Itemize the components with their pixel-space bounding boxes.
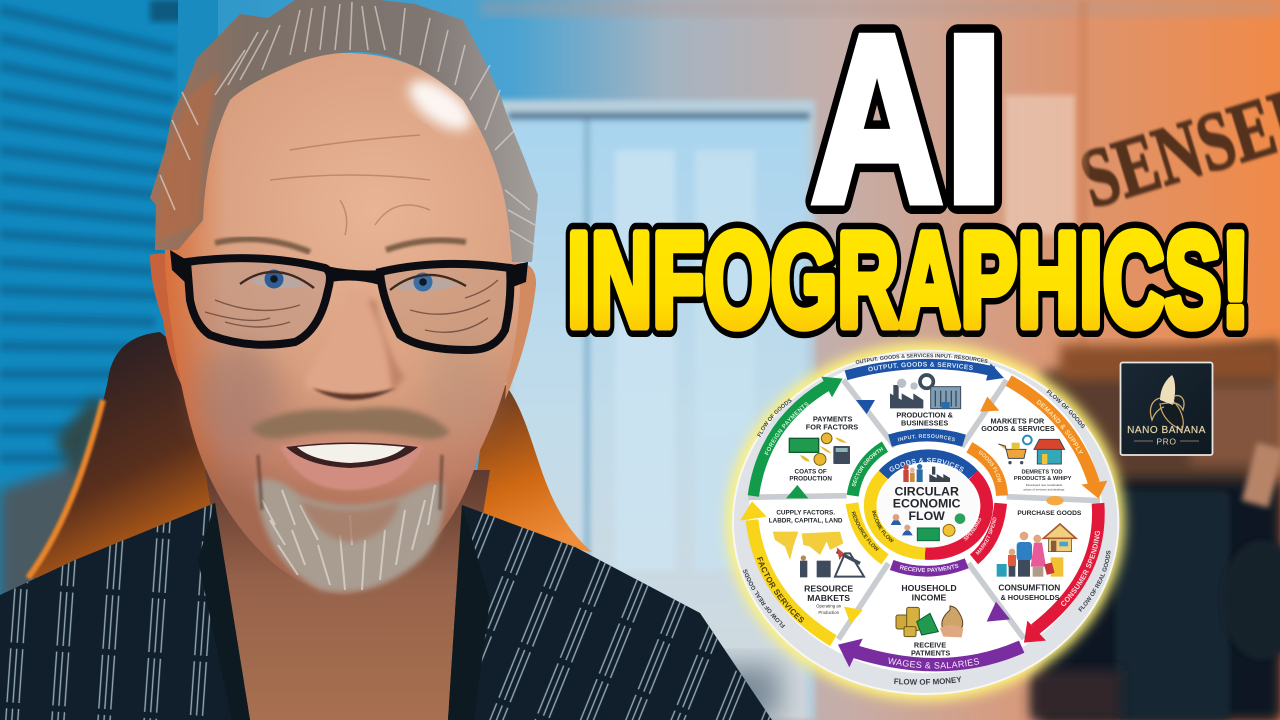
neck [205,470,490,720]
outer ring captions: FLOW OF REAL GOODS [1078,550,1110,612]
panel: consumption and households: PURCHASE GOODS [1017,510,1082,517]
icon: banana [1150,375,1184,430]
panel: resource markets: Operating an [816,603,842,608]
panel: markets for goods and services: prices of services and dealings [1024,488,1065,492]
panel: payments for factors: FOR FACTORS [806,423,858,432]
forehead lines [270,135,430,235]
central hub: SPENDING [964,518,982,540]
panel: household income [896,583,963,658]
arrow: demand and supply (orange) [1006,375,1108,499]
central hub [864,449,994,560]
panel: household income: PATMENTS [911,649,950,658]
white inner disc [749,353,1102,673]
panel: consumption and households: CONSUMFTION [998,583,1060,593]
logo badge: Nano Banana Pro [1120,362,1212,455]
small spoke arrows [786,397,1064,624]
title: INFOGRAPHICS!: INFOGRAPHICS! [567,204,1250,355]
glasses [170,250,528,350]
outer ring captions: OUTPUT. GOODS & SERVICES INPUT- RESOURCES [856,354,988,364]
inner ring labels: RECEIVE PAYMENTS [900,564,958,572]
inner ring labels: GOODS FLOW [978,450,1002,482]
icon: storefront [1034,439,1065,464]
panel: payments for factors [789,415,858,483]
inner ring labels: SECTOR GROWTH [852,447,884,487]
eyebrows [215,239,466,252]
panel: consumption and households: & HOUSEHOLDS [1000,593,1060,602]
hair [150,0,538,262]
arrow: foreign payments (green): FOREIGN PAYMENTS [764,402,809,456]
arrow: factor services (yellow): FACTOR SERVICES [757,556,804,622]
arrow: factor services (yellow) [740,502,837,646]
floor [540,665,780,720]
icon: world map [773,532,843,560]
right eye [396,278,458,291]
icon: worker, machine, oil pump [800,547,864,577]
dark microphone [1222,540,1280,660]
dark monitor [1115,490,1230,720]
panel: markets for goods and services: Developed new sustainable [1026,483,1063,487]
hub title: CIRCULAR [894,484,959,498]
arrow: wages and salaries (purple) [838,638,1024,672]
arrow: wages and salaries (purple): WAGES & SALARIES [888,657,980,669]
left eye [250,275,306,288]
spokes [748,380,1100,639]
icon: cash, coins, calculator [789,433,850,465]
panel: production and businesses: BUSINESSES [901,418,948,427]
icon: shopping cart [998,443,1026,464]
chair [28,332,592,578]
mustache [250,408,450,439]
frames [187,258,510,350]
inner ring labels: INPUT. RESOURCES [898,434,956,442]
outer ring captions [743,354,1110,685]
door frame and door [495,100,815,720]
panel: resource markets: CUPPLY FACTORS. [776,509,835,516]
wheel glow [726,343,1124,701]
nose [305,290,405,400]
arrow: consumer spending (red) [1024,502,1105,643]
hub ring labels: GOODS & SERVICES [889,458,964,472]
white wall panel right of the door [1005,95,1075,235]
title: INFOGRAPHICS!: INFOGRAPHICS! [567,204,1250,355]
outer ring captions: FLOW OF GOODS [757,398,792,437]
panel: consumption and households [997,510,1082,602]
panel: payments for factors: COATS OF [795,468,827,475]
orange wall corner shade [1078,0,1088,360]
panel: markets for goods and services: MARKETS FOR [990,416,1045,425]
panel: markets for goods and services: DEMRETS TOD [1021,469,1063,475]
panel: payments for factors: PAYMENTS [813,415,853,424]
ears [150,254,190,400]
mouth [280,441,424,490]
lenses [187,258,330,345]
eye wrinkles [205,280,498,332]
panel: production and businesses: PRODUCTION & [896,411,954,420]
central hub: ECONOMIC [893,496,961,510]
panel: household income: INCOME [912,593,947,603]
panel: household income: RECEIVE [914,640,946,649]
icon: office building [931,387,961,409]
infographic wheel: circular economic flow [732,350,1120,695]
icon: factory [890,375,933,408]
shelves [1060,345,1280,380]
icon: coins, cash and handshake [896,606,963,637]
panel: resource markets: LABDR, CAPITAL, LAND [769,518,843,525]
outer ring captions: FLOW OF REAL GOODS [743,569,786,628]
panel: payments for factors: PRODUCTION [789,476,832,483]
logo badge: Nano Banana Pro: NANO BANANA [1127,425,1206,436]
forehead highlight [401,70,479,140]
dark room lower right [1040,340,1280,720]
inner ring labels [852,434,1002,572]
outer ring captions: FLOW OF MONEY [894,676,961,685]
arrow: output goods and services (blue) [844,358,1004,381]
arrow: consumer spending (red): CONSUMER SPENDING [1061,530,1100,606]
lower-left dusky wall and plant [0,440,100,610]
icon: cycle [1023,436,1032,444]
window blinds [0,0,218,610]
icon: family [997,532,1063,577]
arrow: foreign payments (green) [748,376,843,497]
person [0,0,772,720]
title: AI [811,0,1005,253]
panel: markets for goods and services: PRODUCTS & WHIPY [1014,476,1072,482]
inner ring labels: MARKET SPEND [976,517,996,555]
hub icons [891,464,965,541]
central hub: INCOME FLOW [872,510,894,542]
panel: resource markets [769,509,864,615]
panel: production and businesses [890,375,961,427]
panel: markets for goods and services: GOODS & SERVICES [981,424,1055,433]
inner ring labels: RESOURCE FLOW [852,511,880,551]
arrow: demand and supply (orange): DEMAND & SUPPLY [1036,400,1084,454]
beard [255,455,444,592]
outer ring [733,351,1118,694]
cheek tint [198,340,282,450]
panel: resource markets: MABKETS [807,593,850,603]
panel: resource markets: RESOURCE [804,583,853,593]
panel: household income: HOUSEHOLD [901,583,957,593]
panel: resource markets: Production [818,610,840,615]
central hub: FLOW [909,509,945,523]
shirt [0,503,772,720]
panel: markets for goods and services [981,416,1072,492]
face [165,53,520,595]
ceiling tint [480,0,1280,16]
inner ring segments [852,435,1002,571]
icon: house [1043,524,1076,552]
outer ring captions: FLOW OF GOODS [1046,390,1085,428]
arrow: output goods and services (blue): OUTPUT. GOODS & SERVICES [868,362,973,372]
badge sub label: PRO [1156,436,1177,446]
